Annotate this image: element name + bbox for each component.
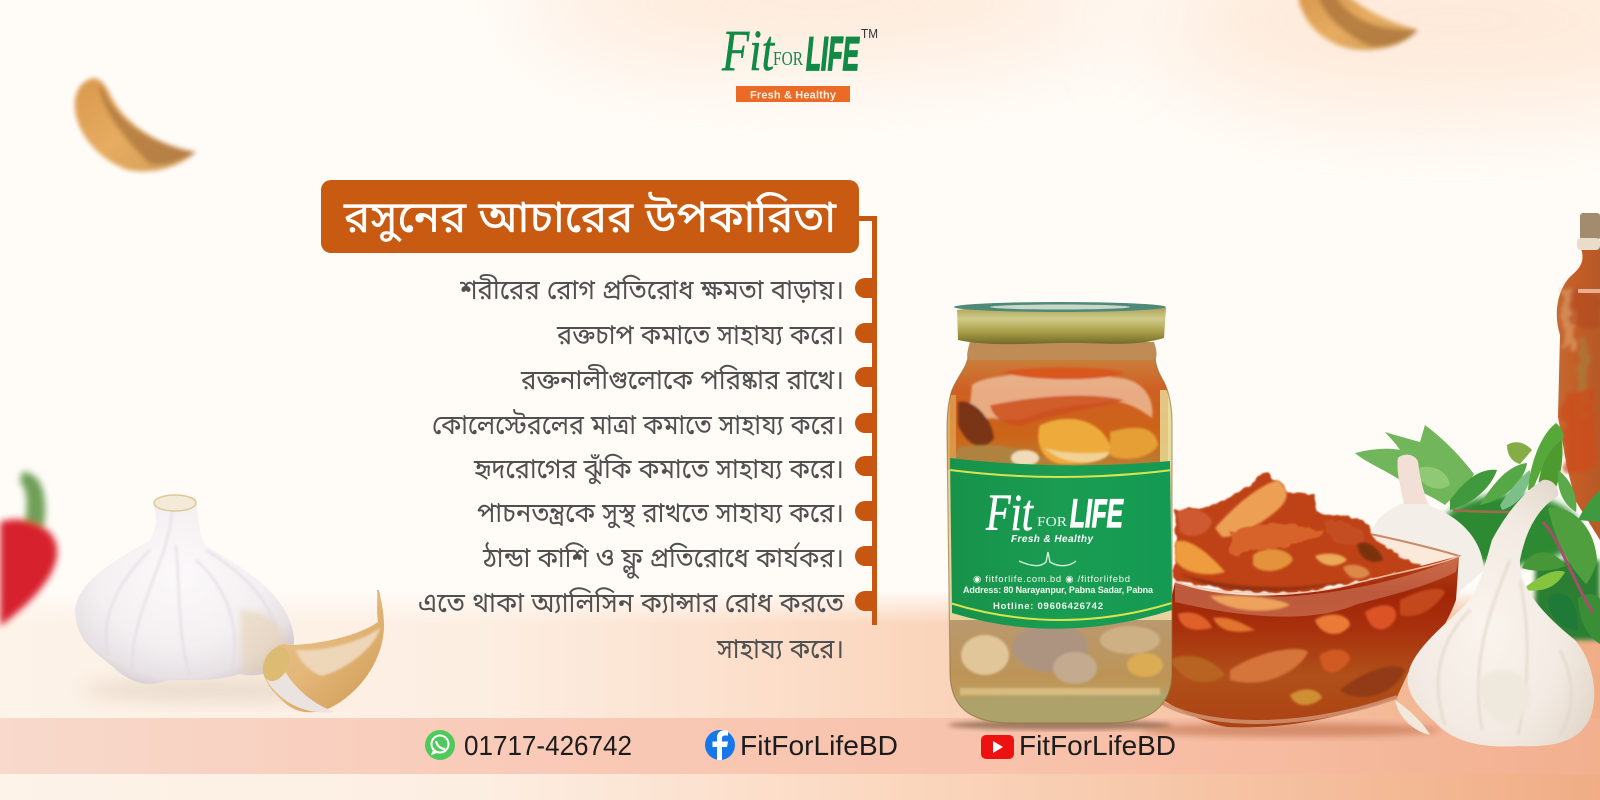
bowl body (1150, 556, 1459, 727)
benefit 7: ঠান্ডা কাশি ও ফ্লু প্রতিরোধে কার্যকর। (482, 541, 844, 580)
whatsapp contact (425, 730, 632, 761)
tagline badge (736, 86, 850, 102)
benefit list connector with bullets (855, 216, 877, 625)
title banner (321, 180, 859, 253)
label hotline: Hotline: 09606426742 (993, 601, 1103, 612)
tagline badge: Fresh & Healthy (750, 90, 837, 102)
garlic clove left (258, 590, 384, 713)
logo (721, 18, 878, 102)
youtube contact (981, 730, 1176, 761)
footer contact band (0, 718, 1600, 774)
decorative blurred garlic clove top left (75, 78, 196, 171)
pickle submerged (1170, 589, 1445, 705)
pickle mound (1175, 473, 1423, 594)
benefit 5: হৃদরোগের ঝুঁকি কমাতে সাহায্য করে। (473, 453, 844, 485)
logo wordmark for: FOR (773, 48, 804, 70)
benefit 6: পাচনতন্ত্রকে সুস্থ রাখতে সাহায্য করে। (477, 498, 844, 529)
title banner: রসুনের আচারের উপকারিতা (343, 191, 837, 242)
bowl of garlic pickle (1140, 473, 1459, 737)
label logo fit: Fit (985, 485, 1034, 542)
facebook contact (705, 730, 898, 761)
jar outline (947, 358, 1172, 723)
youtube handle: FitForLifeBD (1019, 730, 1176, 761)
logo wordmark fit: Fit (721, 18, 775, 83)
benefits list (418, 274, 845, 664)
benefit 2: রক্তচাপ কমাতে সাহায্য করে। (556, 320, 844, 350)
benefit 1: শরীরের রোগ প্রতিরোধ ক্ষমতা বাড়ায়। (459, 274, 844, 305)
product jar (945, 302, 1175, 730)
jar glass and contents (945, 356, 1175, 726)
whatsapp number: 01717-426742 (464, 730, 632, 761)
jar neck (967, 342, 1157, 360)
label tagline: Fresh & Healthy (1011, 534, 1093, 545)
benefit 8 continued: সাহায্য করে। (716, 634, 844, 664)
leaves right (1355, 423, 1600, 644)
icon: youtube (981, 735, 1014, 759)
label logo for: FOR (1037, 515, 1068, 530)
bowl glass back (1370, 534, 1459, 572)
icon: whatsapp (425, 730, 455, 760)
benefit 3: রক্তনালীগুলোকে পরিষ্কার রাখে। (520, 364, 844, 395)
benefit 8: এতে থাকা অ্যালিসিন ক্যান্সার রোধ করতে (418, 587, 845, 618)
pickle bottle right (1557, 213, 1600, 540)
trademark: TM (861, 26, 878, 41)
garlic back right (1371, 455, 1484, 600)
label website: ◉ fitforlife.com.bd ◉ /fitforlifebd (973, 574, 1130, 585)
garlic bulb left (75, 495, 340, 702)
label ornament (1019, 552, 1076, 566)
garlic bulb front right (1395, 480, 1594, 747)
label logo life: LIFE (1070, 492, 1124, 536)
benefit 4: কোলেস্টেরলের মাত্রা কমাতে সাহায্য করে। (432, 409, 844, 440)
label address: Address: 80 Narayanpur, Pabna Sadar, Pabna (963, 585, 1154, 595)
logo wordmark life: LIFE (806, 27, 860, 80)
icon: facebook (705, 730, 735, 760)
facebook handle: FitForLifeBD (740, 730, 898, 761)
jar lid (954, 302, 1166, 344)
decorative blurred garlic clove top right (1298, 0, 1418, 50)
jar label (950, 458, 1172, 629)
bowl glass rim (1175, 556, 1459, 617)
jar shadow (948, 720, 1172, 730)
decorative blurred chili left (0, 472, 57, 626)
